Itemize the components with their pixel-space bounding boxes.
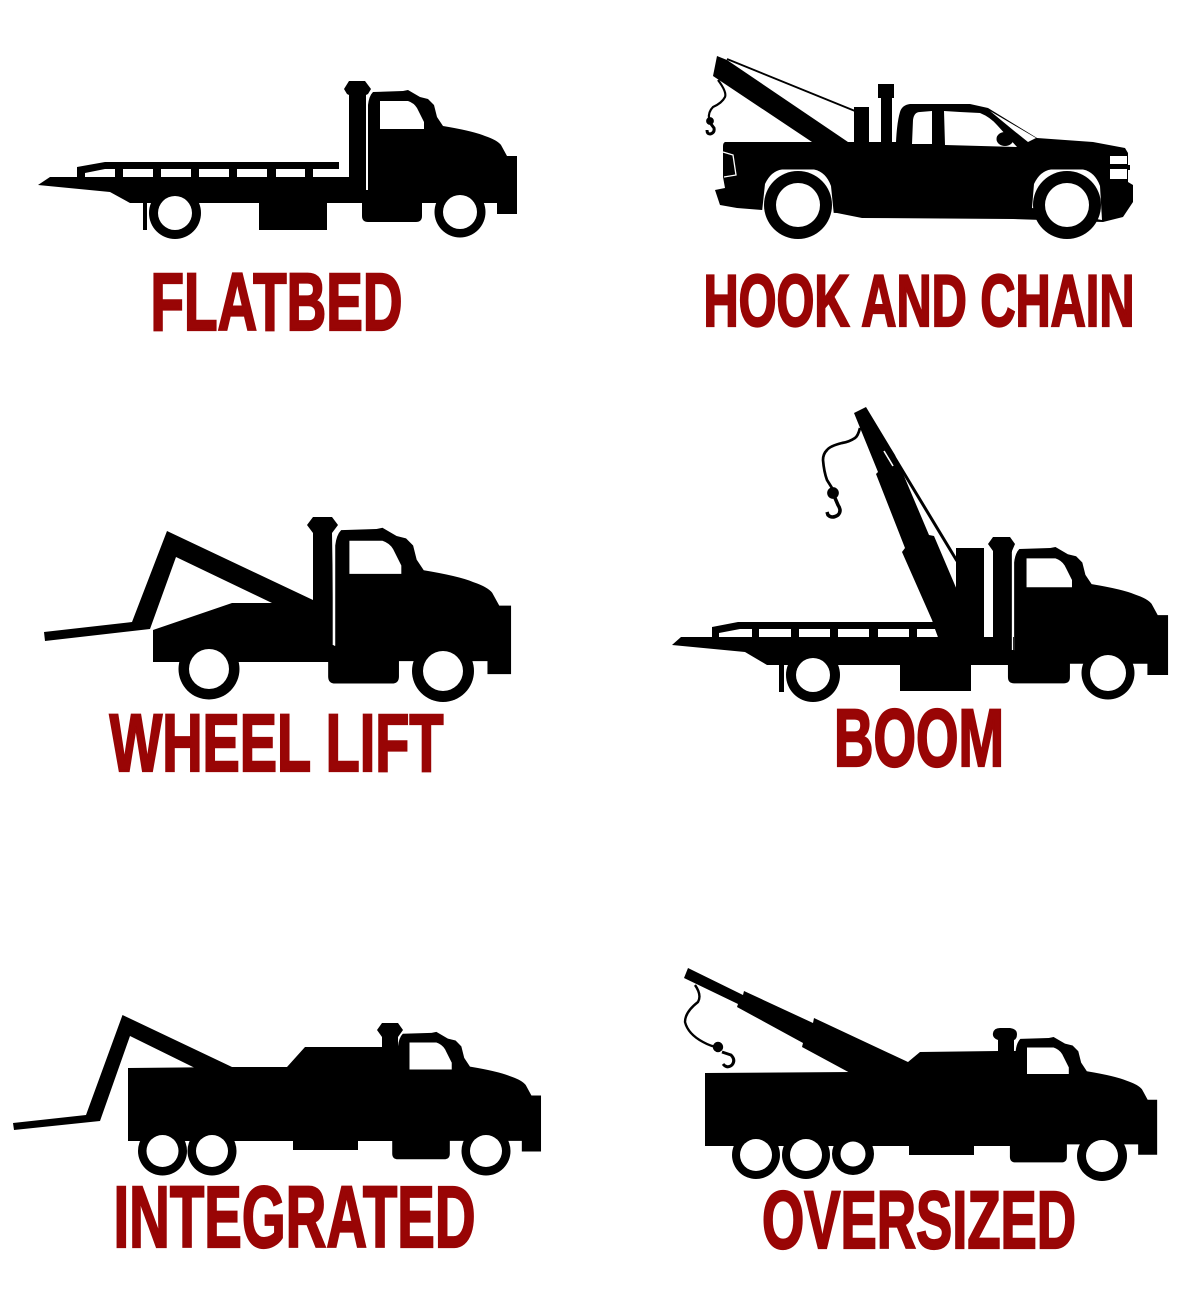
hook and chain: windshield — [990, 111, 1036, 142]
oversized: rear wheel one — [732, 1131, 780, 1179]
integrated: rear wheel two — [188, 1126, 236, 1176]
hook and chain: tail light — [723, 152, 736, 177]
heading: wheel lift: WHEEL LIFT — [110, 698, 444, 789]
heading: boom: BOOM — [834, 693, 1004, 784]
boom: exhaust — [988, 537, 1015, 640]
wheel lift: front wheel — [412, 640, 474, 702]
integrated: boom arm — [13, 1015, 232, 1130]
hook and chain: chain and hook — [707, 80, 725, 134]
integrated: cab — [392, 1032, 541, 1159]
hook and chain: rear wheel — [762, 170, 834, 239]
panel: hook and chain truck — [707, 56, 1133, 239]
heading: integrated: INTEGRATED — [114, 1169, 476, 1266]
oversized: body, fuel tank and exhaust — [705, 1028, 1020, 1155]
panel: boom truck — [672, 407, 1168, 702]
integrated: body, fuel tank and exhaust — [128, 1023, 403, 1150]
boom: crane arm sliver — [884, 451, 893, 466]
oversized: rear wheel two — [782, 1131, 830, 1179]
boom: cab — [1008, 547, 1168, 683]
boom: crane arm — [854, 407, 958, 637]
wheel lift: body and exhaust — [153, 517, 338, 662]
boom: front wheel — [1082, 646, 1134, 700]
panel: wheel lift truck — [44, 517, 511, 702]
oversized: cab — [1010, 1037, 1157, 1162]
wheel lift: rear wheel — [178, 638, 240, 700]
hook and chain: rear cab window — [912, 111, 932, 144]
hook and chain: headlights — [1110, 156, 1127, 179]
integrated: front wheel — [462, 1126, 510, 1176]
hook and chain: mirror — [996, 132, 1014, 146]
flatbed: rear wheel — [149, 187, 201, 239]
hook and chain: boom — [713, 56, 853, 146]
flatbed: front wheel — [434, 186, 486, 238]
panel: oversized truck — [684, 968, 1157, 1181]
panel: integrated truck — [13, 1015, 541, 1176]
oversized: front wheel — [1077, 1131, 1127, 1181]
hook and chain: cable — [727, 59, 855, 111]
integrated: rear wheel one — [138, 1126, 187, 1176]
boom: tower — [956, 548, 984, 638]
heading: flatbed: FLATBED — [150, 257, 402, 348]
hook and chain: side window — [944, 111, 1017, 147]
boom: rear wheel — [786, 648, 840, 702]
hook and chain: pickup body — [715, 104, 1133, 222]
flatbed: bed and chassis — [38, 81, 371, 230]
boom: chain and hook — [823, 428, 860, 517]
flatbed: cab — [362, 90, 517, 222]
oversized: chain and hook — [685, 985, 734, 1067]
panel: flatbed truck — [38, 81, 517, 239]
boom: crane cable — [890, 450, 957, 561]
oversized: rear wheel three — [832, 1133, 874, 1175]
boom: rear support — [779, 665, 784, 692]
wheel lift: boom arm — [44, 531, 313, 641]
hook and chain: tower and exhaust — [854, 84, 894, 145]
wheel lift: cab — [328, 528, 511, 684]
flatbed: rear support — [143, 203, 147, 230]
boom: bed and chassis — [672, 622, 1014, 691]
oversized: telescopic boom — [684, 968, 920, 1074]
hook and chain: front wheel — [1032, 170, 1102, 239]
